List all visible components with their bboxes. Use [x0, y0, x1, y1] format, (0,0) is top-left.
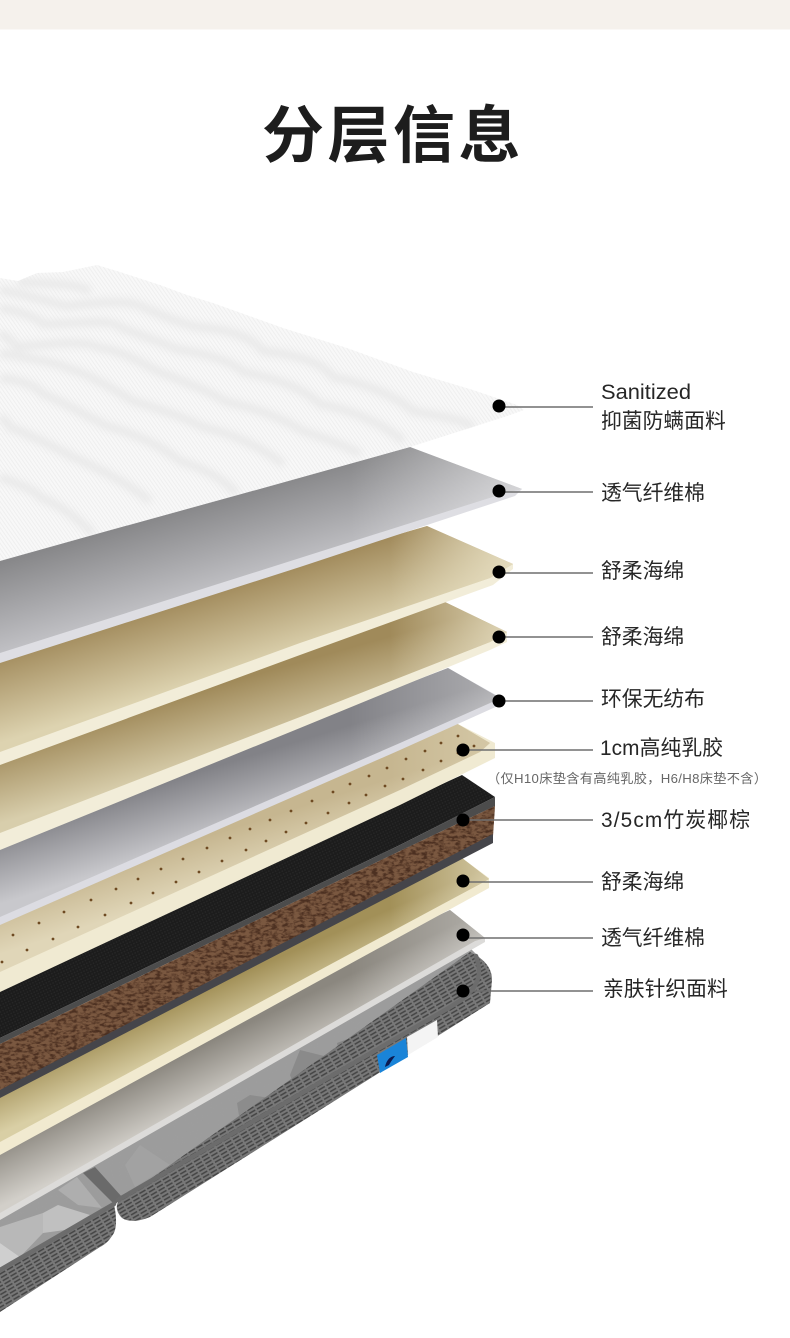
label: Sanitized: Sanitized	[601, 381, 691, 404]
label: anti-mite fabric: 抑菌防螨面料	[601, 410, 726, 433]
pinholes	[1, 735, 475, 963]
layer: comfort foam 8	[0, 858, 489, 1155]
label: comfort foam 1: 舒柔海绵	[601, 560, 684, 583]
coconut fibre side	[0, 806, 495, 1092]
mattress layer stack	[0, 265, 593, 1312]
top cream band	[0, 0, 790, 30]
label: skin-friendly knit: 亲肤针织面料	[603, 978, 728, 1001]
layer: eco non-woven	[0, 668, 503, 925]
hexagon quilting	[0, 1037, 387, 1270]
title: 分层信息	[262, 102, 524, 171]
layer: comfort foam 3	[0, 526, 513, 765]
layer: Sanitized quilted fabric	[0, 265, 524, 561]
label: breathable fibre 2: 透气纤维棉	[601, 927, 705, 950]
front band left section	[0, 1204, 116, 1312]
black top surface	[0, 775, 495, 1038]
label: latex: 1cm高纯乳胶	[600, 737, 723, 760]
label: bamboo charcoal coconut: 3/5cm竹炭椰棕	[601, 809, 750, 832]
layer: latex with pinholes	[0, 723, 495, 992]
layer: breathable fibre 9	[0, 910, 485, 1220]
dark edge band	[0, 797, 495, 1044]
piping lip	[0, 956, 479, 1270]
label: comfort foam 3: 舒柔海绵	[601, 871, 684, 894]
label: comfort foam 2: 舒柔海绵	[601, 626, 684, 649]
bottom dark band	[0, 834, 493, 1098]
layer: knit base mattress	[0, 948, 492, 1312]
layer: breathable fibre 2	[0, 447, 522, 663]
label: eco non-woven: 环保无纺布	[601, 688, 705, 711]
mattress top surface	[0, 948, 488, 1270]
label: breathable fibre: 透气纤维棉	[601, 482, 705, 505]
marker dots	[456, 400, 506, 998]
gap between mattress sections	[83, 1167, 122, 1205]
leader lines	[464, 407, 593, 991]
white tag	[407, 1020, 438, 1055]
layer: bamboo charcoal coconut	[0, 775, 495, 1098]
front band right section	[117, 952, 492, 1221]
quilted wave shading	[0, 282, 473, 534]
layer labels	[487, 381, 767, 1001]
blue tag	[377, 1038, 408, 1073]
note: latex availability: （仅H10床垫含有高纯乳胶，H6/H8床垫不含）	[487, 770, 767, 786]
layer: comfort foam 4	[0, 602, 507, 850]
tag logo	[385, 1056, 395, 1067]
